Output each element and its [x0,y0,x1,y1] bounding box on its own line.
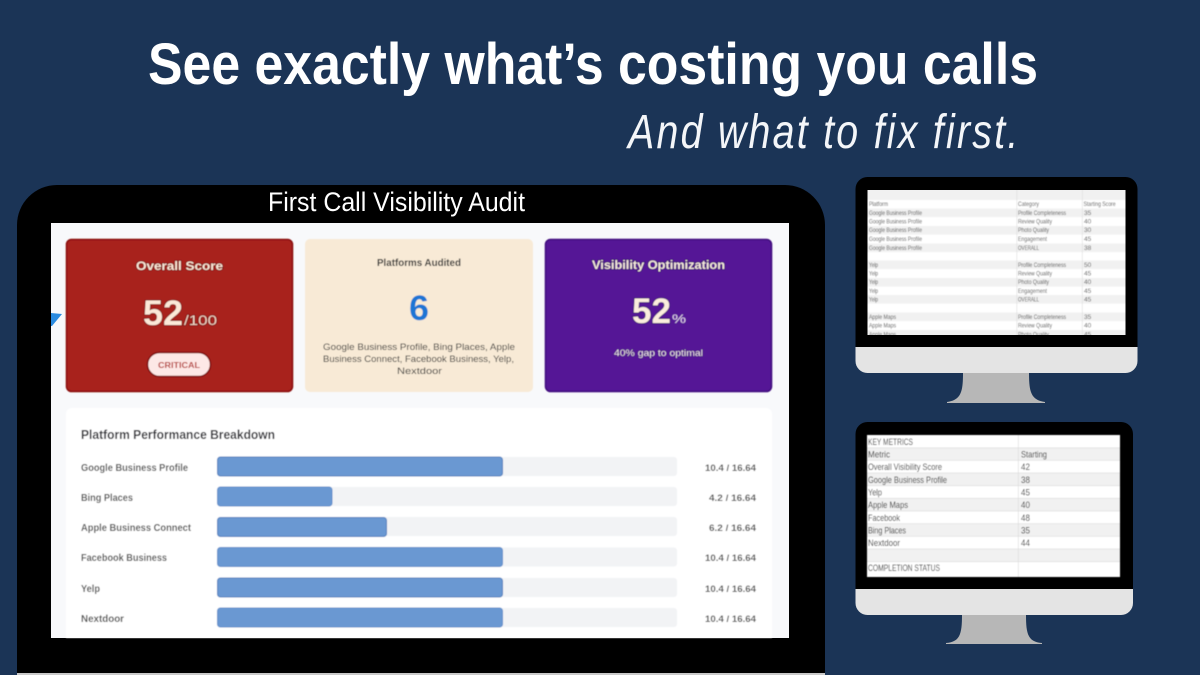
key metrics rows: Nextdoor [868,538,900,549]
overall score max: /100 [184,312,217,328]
spreadsheet rows: Apple Maps [869,314,897,321]
row: Google Business Profile: 10.4 / 16.64 [705,463,757,474]
monitor chin [856,589,1133,615]
monitor chin [856,347,1138,373]
row: Apple Business Connect [81,517,757,536]
row: Apple Business Connect: 6.2 / 16.64 [709,523,757,534]
gap note: 40% gap to optimal [614,348,703,359]
key metrics rows: Yelp [868,488,882,498]
row: Yelp: 10.4 / 16.64 [705,584,757,595]
row: Facebook Business [81,548,757,566]
laptop mockup [17,185,825,675]
monitor: key metrics spreadsheet [856,422,1133,644]
laptop base edge [17,673,825,675]
spreadsheet rows: Yelp [869,262,878,269]
spreadsheet rows: 45 [1084,288,1092,295]
percent sign: % [672,312,686,326]
spreadsheet rows: Review Quality [1018,218,1053,226]
spreadsheet rows [869,201,1116,338]
spreadsheet rows: Engagement [1018,288,1047,295]
row: Facebook Business: Facebook Business [81,553,167,564]
critical badge [148,352,210,376]
spreadsheet rows: Google Business Profile [869,218,922,226]
spreadsheet rows: Apple Maps [869,322,897,330]
platforms audited label: Platforms Audited [377,257,461,269]
visibility value: 52 [632,292,671,331]
row: Google Business Profile: Google Business Profile [81,463,188,474]
key metrics rows: 38 [1021,475,1030,486]
spreadsheet rows: 40 [1084,218,1092,226]
spreadsheet rows: Yelp [869,296,878,304]
spreadsheet rows: 50 [1084,262,1092,269]
subtitle: And what to fix first. [625,105,1018,159]
laptop heading: First Call Visibility Audit [268,187,525,217]
spreadsheet rows: Starting Score [1084,201,1116,208]
spreadsheet rows: Google Business Profile [869,210,922,217]
key metrics rows: Facebook [868,513,900,524]
row: Nextdoor: 10.4 / 16.64 [705,614,757,625]
spreadsheet rows: 35 [1084,210,1092,217]
spreadsheet rows: Yelp [869,279,878,286]
monitor frame [856,422,1133,589]
key metrics rows: Apple Maps [868,500,908,511]
monitor: platform scores spreadsheet [856,177,1138,403]
spreadsheet rows: Review Quality [1018,270,1053,278]
platforms count: 6 [409,289,429,328]
spreadsheet rows: Profile Completeness [1018,314,1067,321]
spreadsheet rows: Apple Maps [869,332,897,338]
spreadsheet screen [868,190,1126,335]
row: Apple Business Connect: Apple Business Connect [81,523,192,534]
key metrics rows: 45 [1021,488,1030,498]
key metrics rows: Overall Visibility Score [868,462,942,473]
critical badge: CRITICAL [158,360,200,370]
spreadsheet rows: 45 [1084,332,1092,338]
platforms list: Nextdoor [397,366,442,377]
key metrics rows: 35 [1021,526,1030,536]
row: Bing Places: 4.2 / 16.64 [709,493,757,504]
title: See exactly what’s costing you calls [148,32,1038,97]
key metrics rows: KEY METRICS [868,437,913,448]
spreadsheet rows: Google Business Profile [869,245,922,252]
key metrics rows: 44 [1021,538,1030,549]
monitor stand [947,373,1045,403]
platforms list [323,342,515,377]
spreadsheet rows: Platform [869,201,888,208]
key metrics rows: COMPLETION STATUS [868,563,940,574]
key metrics rows: Bing Places [868,526,906,536]
monitor stand [946,615,1042,644]
row: Nextdoor: Nextdoor [81,614,124,625]
spreadsheet rows: 45 [1084,270,1092,278]
spreadsheet rows: Photo Quality [1018,227,1050,234]
spreadsheet rows: OVERALL [1018,296,1039,304]
key metrics rows: 40 [1021,500,1030,511]
key metrics rows [868,437,1047,574]
spreadsheet rows: OVERALL [1018,245,1039,252]
spreadsheet rows: 38 [1084,245,1092,252]
spreadsheet rows: Profile Completeness [1018,262,1067,269]
overall score label: Overall Score [136,259,223,273]
blue wedge [51,313,62,326]
spreadsheet rows: Review Quality [1018,322,1053,330]
panel: overall score [66,240,292,392]
row: Google Business Profile [81,457,757,476]
spreadsheet rows: Yelp [869,270,878,278]
monitor frame [856,177,1138,347]
spreadsheet rows: Engagement [1018,236,1047,243]
panel: platform performance breakdown [66,408,772,638]
row: Nextdoor [81,608,757,627]
platforms list: Google Business Profile, Bing Places, Apple [323,342,515,353]
spreadsheet rows: 30 [1084,227,1092,234]
spreadsheet rows: 35 [1084,314,1092,321]
visibility label: Visibility Optimization [592,258,725,272]
key metrics screen [867,435,1120,577]
spreadsheet rows: 45 [1084,236,1092,243]
spreadsheet rows: Photo Quality [1018,279,1050,286]
key metrics rows: Google Business Profile [868,475,947,486]
spreadsheet rows: 45 [1084,296,1092,304]
spreadsheet rows: Profile Completeness [1018,210,1067,217]
key metrics rows: Metric [868,450,890,460]
key metrics rows: 42 [1021,462,1030,473]
row: Yelp [81,578,757,597]
spreadsheet rows: Photo Quality [1018,332,1050,338]
breakdown heading: Platform Performance Breakdown [81,428,275,442]
row: Facebook Business: 10.4 / 16.64 [705,553,757,564]
key metrics rows: 48 [1021,513,1030,524]
spreadsheet rows: Yelp [869,288,878,295]
overall score value: 52 [143,294,183,333]
laptop screen [51,223,789,638]
row: Yelp: Yelp [81,584,100,595]
row: Bing Places: Bing Places [81,493,133,504]
spreadsheet rows: Google Business Profile [869,236,922,243]
key metrics rows: Starting [1021,450,1047,460]
spreadsheet rows: 40 [1084,279,1092,286]
spreadsheet rows: Google Business Profile [869,227,922,234]
spreadsheet rows: Category [1018,201,1040,208]
panel: platforms audited [305,239,533,392]
laptop frame [17,185,825,673]
panel: visibility optimization [546,240,772,392]
spreadsheet rows: 40 [1084,322,1092,330]
platforms list: Business Connect, Facebook Business, Yelp, [323,354,514,365]
row: Bing Places [81,487,757,506]
